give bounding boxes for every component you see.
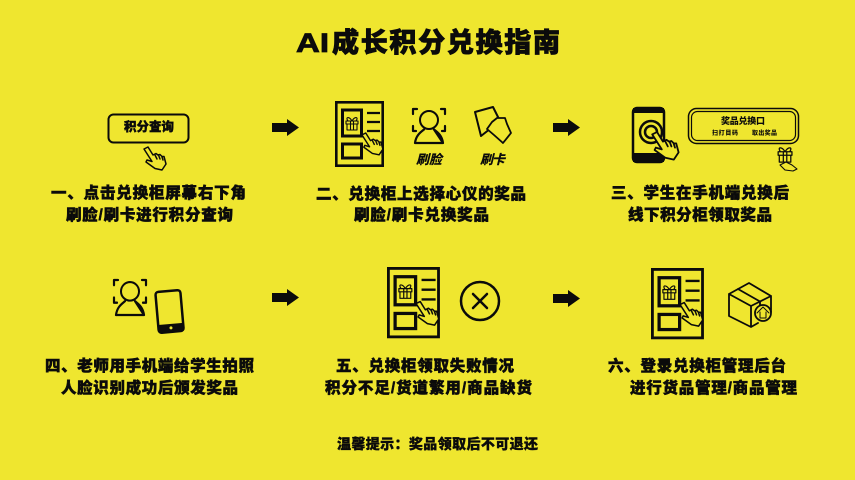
arrow: step 2 to 3 <box>553 119 580 136</box>
arrow: step 5 to 6 <box>553 290 580 307</box>
panel: step 3 <box>611 108 798 224</box>
icon: failure cross <box>461 282 499 320</box>
panel: step 5 <box>325 268 532 397</box>
icon: parcel box <box>729 283 771 327</box>
title: 成长积分兑换指南 <box>332 27 560 58</box>
step 5 text: 五、兑换柜领取失败情况 <box>336 356 514 375</box>
icon: points query button <box>108 114 188 170</box>
step 1 text <box>51 183 246 224</box>
panel: prize exchange port: 奖品兑换口 <box>721 115 765 126</box>
step 4 text: 人脸识别成功后颁发奖品 <box>61 378 238 397</box>
title: AI <box>296 28 329 58</box>
step 6 text: 进行货品管理/商品管理 <box>630 378 797 397</box>
panel: prize exchange port <box>688 108 798 144</box>
step 3 text: 线下积分柜领取奖品 <box>628 205 772 224</box>
panel: step 2 <box>316 102 526 224</box>
arrow: step 4 to 5 <box>272 289 299 306</box>
icon: exchange kiosk <box>336 102 383 166</box>
step 3 text <box>611 183 789 224</box>
icon: exchange kiosk <box>652 269 703 338</box>
panel: step 6 <box>608 269 797 397</box>
step 3 text: 三、学生在手机端兑换后 <box>611 183 789 202</box>
step 4 text <box>45 356 254 397</box>
panel: prize exchange port: 取出奖品 <box>752 129 777 137</box>
arrow: step 1 to 2 <box>272 119 299 136</box>
panel: step 4 <box>45 280 254 397</box>
step 5 text <box>325 356 532 397</box>
icon: phone with touch <box>633 108 679 162</box>
icon: card swipe <box>475 107 511 143</box>
icon: face scan <box>114 280 146 315</box>
label: face: 刷脸 <box>416 152 444 167</box>
step 6 text: 六、登录兑换柜管理后台 <box>608 356 786 375</box>
panel: step 1 <box>51 114 246 224</box>
footer note: 温馨提示：奖品领取后不可退还 <box>337 436 538 452</box>
step 2 text: 二、兑换柜上选择心仪的奖品 <box>316 184 526 203</box>
label: card: 刷卡 <box>480 152 507 167</box>
icon: face scan <box>413 109 445 143</box>
icon: points query button: 积分查询 <box>124 119 174 134</box>
icon: tilted phone <box>155 290 184 333</box>
step 1 text: 一、点击兑换柜屏幕右下角 <box>51 183 246 202</box>
icon: exchange kiosk <box>388 268 439 337</box>
step 2 text: 刷脸/刷卡兑换奖品 <box>354 205 489 224</box>
icon: gift in hand <box>778 148 797 171</box>
step 4 text: 四、老师用手机端给学生拍照 <box>45 356 254 375</box>
panel: prize exchange port: 扫打目码 <box>712 129 738 137</box>
step 6 text <box>608 356 797 397</box>
step 1 text: 刷脸/刷卡进行积分查询 <box>66 205 233 224</box>
step 5 text: 积分不足/货道繁用/商品缺货 <box>325 378 532 397</box>
step 2 text <box>316 184 526 224</box>
